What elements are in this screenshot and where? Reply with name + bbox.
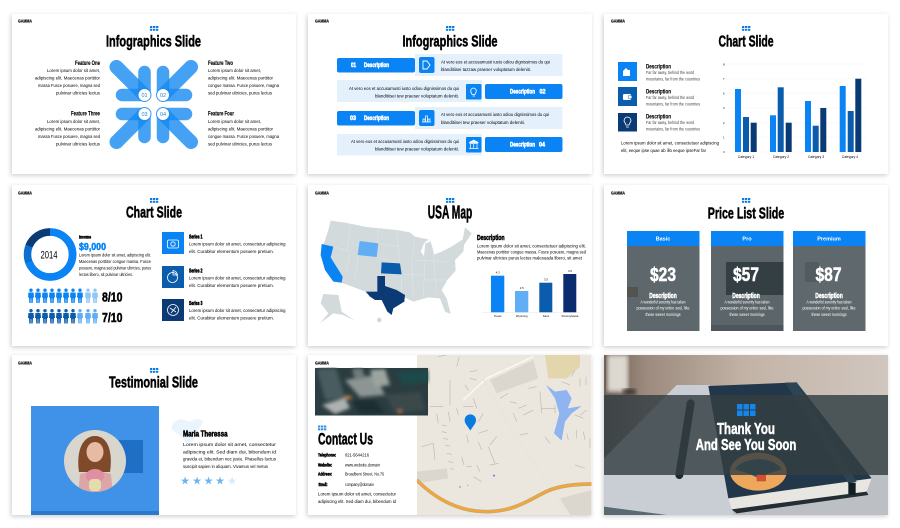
row 01: blanditiisei tazzaw praeser voluptatum deleniti. (441, 67, 531, 72)
state: Texas (366, 276, 405, 315)
bar chart: Kans (543, 314, 550, 318)
price card: premium: possession of my entire soul, like (802, 306, 856, 310)
text block: feature two: Lorem ipsum dolor sit amet, (208, 68, 261, 73)
row 01: At vero eos et accusamusti iusto odiou dignissimos du qui (441, 60, 550, 64)
series 3: Series 3 (189, 301, 203, 307)
icon: grid (150, 26, 158, 31)
contact details: Telephone: (318, 452, 336, 458)
text block: elit, eeque ipse quae ab illo eeque ipseFar far (621, 148, 706, 154)
diagram: converging arrows with numbered circles (116, 67, 191, 142)
text block: feature three: Feature Three (71, 112, 100, 118)
heading: thank you: Thank You (717, 421, 775, 438)
bar chart: 2.5 (520, 286, 524, 290)
income stat: $9,000 (79, 242, 106, 253)
text block: feature three: massa Fusce posuere, magna sed (38, 134, 101, 139)
quote mark (172, 419, 203, 443)
price card: pro: possession of my entire soul, like (720, 306, 774, 310)
brand label: GAMMA (18, 190, 32, 196)
item 1: Description (646, 64, 671, 70)
row 02 (337, 80, 562, 102)
star rating: ★ (215, 476, 225, 488)
slide 3: bar chart slide (604, 14, 888, 174)
star rating: ★ (227, 476, 237, 488)
row 04 (337, 134, 562, 156)
street map (417, 355, 592, 515)
text block: description: Description (477, 235, 504, 242)
brand label: GAMMA (611, 18, 625, 24)
star rating: ★ (192, 476, 202, 488)
bar chart: 2 (723, 121, 725, 125)
slide 7: testimonial (12, 355, 296, 515)
text block (621, 140, 719, 154)
row 01: 01 (351, 63, 356, 69)
contact details: Broadbent Street, No.76 (345, 472, 385, 476)
text block: description: Lorem ipsum dolor sit amet, consectetuer adipiscing elit. (477, 244, 586, 248)
price card: basic: possession of my entire soul, like (636, 306, 690, 310)
bar chart: 8 (723, 62, 725, 66)
row 04: 04 (539, 142, 546, 148)
bar chart: Category 3 (808, 155, 824, 159)
text block: testimonial (183, 430, 277, 469)
text block: feature two: congue massa. Fusce posuere, magna (208, 83, 280, 88)
income stat: Maecenas porttitor congue massa. Fusce (79, 259, 152, 264)
item 3 (618, 113, 700, 132)
icon: grid (737, 404, 756, 416)
row 03: Description (364, 116, 389, 122)
text block: feature three: adipiscing elit. Maecenas porttitor (35, 126, 101, 132)
series 3: Lorem ipsum dolor sit amet, consectetur adipiscing (189, 308, 286, 313)
text block: testimonial: Maria Theressa (183, 430, 228, 438)
row 01: Description (364, 63, 389, 69)
price card: pro: A wonderful serenity has taken (724, 300, 770, 304)
title: Price List Slide (708, 206, 784, 222)
item 3: Description (646, 114, 671, 120)
city photo (315, 368, 428, 416)
text block: feature one: massa Fusce posuere, magna sed (38, 83, 101, 88)
item 2: mountains, far from the countries (646, 102, 700, 106)
row 03: 03 (350, 116, 357, 122)
text block: feature three: Lorem ipsum dolor sit amet, (47, 119, 100, 124)
bar chart: Category 4 (842, 155, 858, 159)
price card: basic (627, 231, 700, 331)
text block: testimonial: adipiscing elit. Sed diam dui, bibendum id (183, 450, 277, 454)
donut chart (28, 232, 73, 277)
photo panel: blue room with portrait (31, 406, 159, 515)
contact details: 021-5644216 (345, 452, 370, 458)
icon: grid (446, 198, 454, 203)
item 3: mountains, far from the countries (646, 126, 700, 132)
price card: pro: Pro (742, 236, 752, 242)
row 04: At vero eos et accusamusti iusto odiou dignissimos du qui (351, 139, 459, 144)
brand label: GAMMA (611, 190, 625, 196)
text block: testimonial: Lorem ipsum dolor sit amet, consectetur (183, 442, 277, 447)
item 1 (618, 62, 700, 82)
contact details (318, 452, 385, 487)
slide 6: price list (604, 185, 888, 346)
series 3 (162, 299, 286, 321)
price card: premium: these sweet mornings (812, 312, 846, 317)
income stat: lectus libero, sit pulvinar ultricies. (79, 272, 133, 277)
text block: feature four: Feature Four (208, 112, 234, 118)
text block: description: pulvinar ultricies purus lectus malesuada libero, sit amet (477, 256, 583, 260)
series 2: elit. Curabitur elementum posuere pretium. (189, 283, 274, 288)
icon: grid (446, 26, 454, 31)
text block: feature four: sed pulvinar ultricies, purus lectus (208, 142, 272, 146)
bar chart: Wyoming (516, 314, 528, 318)
map (320, 221, 472, 323)
text block: testimonial: suscipit sapien in aliquam. Vivamus vel metus (183, 464, 268, 469)
price card: basic: $23 (650, 265, 676, 286)
star rating (180, 476, 237, 488)
text block: feature four: congue massa. Fusce posuere, magna (208, 134, 280, 139)
bar chart (482, 269, 580, 318)
bar chart: 7 (723, 77, 725, 81)
icon: grid (742, 198, 750, 203)
title: Infographics Slide (402, 34, 498, 50)
slide 4: donut and pictogram chart slide (12, 185, 296, 346)
series 2 (162, 266, 286, 288)
item 1: Far far away, behind the word (646, 70, 695, 75)
state: California (321, 244, 343, 283)
price card: basic: these sweet mornings (646, 312, 680, 317)
brand label: GAMMA (315, 360, 329, 366)
series 1: Lorem ipsum dolor sit amet, consectetur adipiscing (189, 242, 286, 246)
row 03 (337, 107, 562, 129)
row 04: blanditiisei tew praeser voluptatum deleniti. (375, 146, 459, 152)
dark band (604, 395, 888, 475)
text block: feature two: sed pulvinar ultricies, purus lectus (208, 90, 272, 96)
price card: premium (793, 231, 866, 331)
item 3: Far far away, behind the word (646, 120, 695, 125)
text block: description: Maecenas porttitor congue massa. Fusce posuere, magna sed (477, 250, 587, 254)
heading: thank you (696, 421, 796, 454)
bar chart: 3.5 (544, 278, 548, 282)
diagram: converging arrows with numbered circles: 03 (141, 112, 148, 118)
bar chart: Pennsylvania (562, 314, 579, 318)
bar chart: Texas (494, 314, 502, 318)
state: Kansas (381, 262, 402, 274)
text block: description (477, 235, 587, 260)
price card: premium: Description (815, 293, 843, 300)
slide 8: contact (308, 355, 592, 515)
row 03: blanditiisei tew praeser voluptatum deleniti. (441, 120, 525, 125)
text block: feature four: Lorem ipsum dolor sit amet, (208, 119, 261, 124)
row 02: blanditiisei tew praeser voluptatum deleniti. (375, 94, 459, 98)
star rating: ★ (204, 476, 214, 488)
row 04: Description (510, 142, 535, 148)
price card: pro: these sweet mornings (730, 312, 764, 317)
item 2: Far far away, behind the word (646, 95, 695, 100)
title: USA Map (428, 202, 472, 222)
contact details: company@domain (345, 482, 374, 487)
bar chart: 3 (723, 106, 725, 110)
row 01 (337, 54, 562, 76)
item 2 (618, 87, 700, 106)
pictogram: 7 of 10 (28, 309, 122, 325)
state: Hawaii (377, 318, 382, 322)
contact details: Address: (318, 472, 332, 476)
text block: feature one: Lorem ipsum dolor sit amet, (47, 68, 100, 73)
price card: basic: Description (649, 293, 677, 300)
text block: feature two: adipiscing elit. Maecenas porttitor (208, 76, 274, 80)
text block: feature four: adipiscing elit. Maecenas porttitor (208, 126, 274, 132)
contact details: www.website.domain (345, 462, 381, 468)
contact details: Email: (318, 482, 328, 487)
state: Alaska (320, 294, 355, 323)
series 2: Lorem ipsum dolor sit amet, consectetur adipiscing (189, 276, 286, 280)
title: Infographics Slide (106, 34, 201, 50)
slide 5: USA map (308, 185, 592, 346)
row 02: Description (510, 90, 535, 96)
income stat: posuere, magna sed pulvinar ultricies, purus (79, 266, 151, 270)
series 1: elit. Curabitur elementum posuere pretium. (189, 249, 274, 254)
heading: thank you: And See You Soon (696, 437, 796, 454)
bar chart: 6 (723, 92, 725, 96)
title: Chart Slide (126, 204, 182, 222)
contact details: Website: (318, 462, 332, 468)
slide 2: infographics with four description rows (308, 14, 592, 174)
income stat (79, 234, 152, 277)
star rating: ★ (180, 476, 190, 488)
donut chart: 2014 (40, 250, 58, 262)
row 02: 02 (540, 90, 546, 96)
text block: testimonial: gravida et, bibendum nec justo. Phasellus luctus (183, 456, 276, 462)
pictogram: 7 of 10: 7/10 (102, 310, 122, 325)
icon: grid (150, 198, 158, 203)
diagram: converging arrows with numbered circles: 02 (160, 93, 166, 99)
background photo: notebook on desk (604, 355, 888, 515)
pictogram: 8 of 10 (28, 288, 122, 304)
text block: feature one: Feature One (75, 61, 100, 67)
bar chart: Category 1 (738, 155, 754, 159)
text block: adipiscing elit. Sed diam dui, bibendum id (318, 499, 396, 505)
bar chart: 4.5 (568, 269, 572, 273)
text block: feature two (208, 61, 280, 96)
icon: grid (742, 26, 750, 31)
bar chart: 4.3 (496, 270, 500, 274)
price card: basic: Basic (656, 236, 670, 242)
diagram: converging arrows with numbered circles: 04 (160, 112, 166, 118)
brand label: GAMMA (18, 18, 32, 24)
text block: feature three (35, 112, 101, 146)
text block: feature one: adipiscing elit. Maecenas porttitor (35, 76, 101, 80)
state: Wyoming (358, 241, 378, 257)
title: Testimonial Slide (109, 374, 198, 392)
price card: pro: Description (732, 293, 760, 300)
bar chart (723, 62, 867, 159)
text block: feature two: Feature Two (208, 61, 233, 67)
item 1: mountains, far from the countries (646, 76, 700, 82)
heading: contact us: Contact Us (318, 430, 373, 448)
series 3: elit. Curabitur elementum posuere pretium. (189, 316, 274, 320)
price card: premium: A wonderful serenity has taken (806, 300, 852, 304)
text block: feature three: pulvinar ultricies lectus (56, 142, 100, 146)
slide 1: infographics with four features (12, 14, 296, 174)
series 1 (162, 232, 286, 254)
series 2: Series 2 (189, 268, 203, 274)
text block: feature one (35, 61, 101, 96)
text block: Lorem ipsum dolor sit amet, consectetur (318, 492, 396, 498)
bar chart: Category 2 (773, 155, 789, 159)
icon: grid (318, 426, 326, 430)
bar chart: 1 (723, 136, 725, 140)
price card: basic: A wonderful serenity has taken (640, 300, 686, 304)
pictogram: 8 of 10: 8/10 (102, 290, 122, 304)
bar chart: 0 (723, 150, 725, 154)
price card: premium: Premium (817, 236, 841, 242)
brand label: GAMMA (315, 190, 329, 196)
brand label: GAMMA (18, 360, 32, 366)
contact panel (308, 355, 417, 515)
item 2: Description (646, 90, 671, 96)
text block: Lorem ipsum dolor sit amet, consectetuer adipiscing (621, 140, 719, 146)
title: Chart Slide (718, 34, 774, 50)
income stat: Income (79, 234, 91, 240)
text block: feature four (208, 112, 280, 146)
text block: feature one: pulvinar ultricies lectus (56, 90, 100, 96)
price card: premium: $87 (816, 265, 842, 286)
row 03: At vero eos et accusamusti iusto odiou dignissimos du qui (441, 112, 549, 117)
brand label: GAMMA (315, 18, 329, 24)
text block (318, 492, 396, 505)
icon: location pin (465, 414, 476, 431)
row 02: At vero eos et accusamusti iusto odiou dignissimos du qui (349, 86, 459, 91)
slide 9: thank you (604, 355, 888, 515)
icon: grid (150, 368, 158, 373)
series 1: Series 1 (189, 234, 203, 240)
price card: pro: $57 (733, 265, 759, 286)
diagram: converging arrows with numbered circles: 01 (141, 93, 148, 99)
income stat: Lorem ipsum dolor sit amet, adipiscing elit. (79, 252, 151, 258)
price card: pro (711, 231, 784, 331)
